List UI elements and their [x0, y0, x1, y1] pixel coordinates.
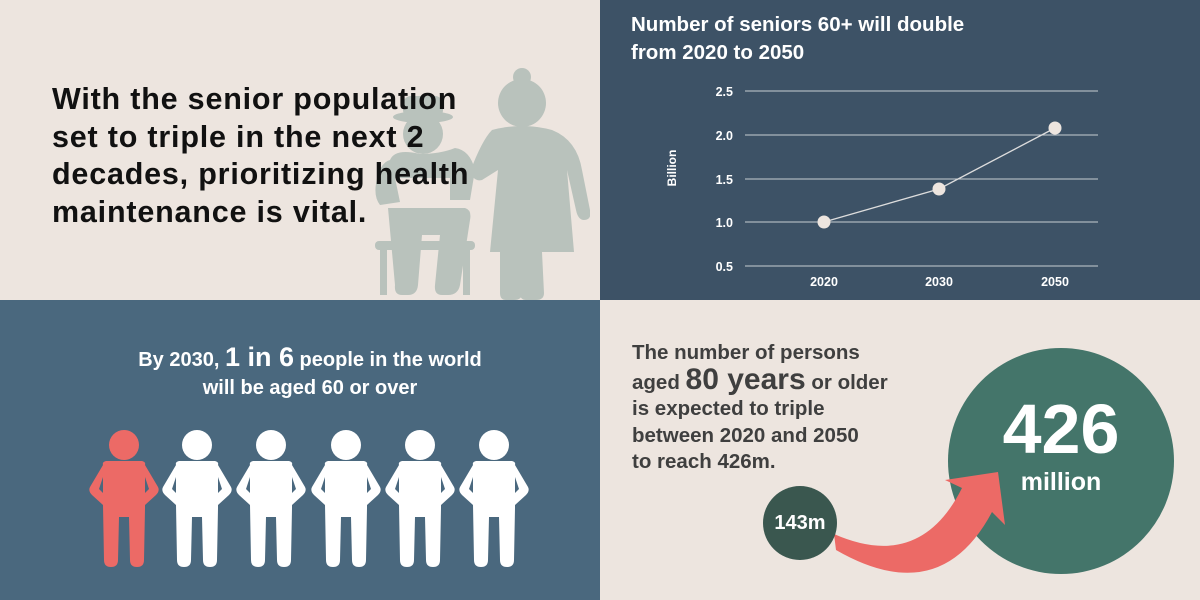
line chart: 2.5 — [716, 85, 733, 99]
text block: 80 years: aged 80 years or older — [632, 362, 888, 396]
big circle: 426 million — [948, 348, 1174, 574]
line chart — [665, 85, 1098, 289]
heading: intro statement: decades, prioritizing health — [52, 157, 469, 191]
line chart: 2020 — [810, 275, 838, 289]
panel: intro — [0, 0, 600, 300]
heading: intro statement: maintenance is vital. — [52, 194, 367, 228]
text block: 80 years: between 2020 and 2050 — [632, 424, 859, 446]
heading: 1 in 6: will be aged 60 or over — [203, 377, 417, 399]
chart title: Number of seniors 60+ will double — [631, 13, 964, 36]
text block: 80 years: The number of persons — [632, 341, 860, 364]
heading: 1 in 6: By 2030, 1 in 6 people in the world — [138, 342, 482, 372]
small circle: 143m — [763, 486, 837, 560]
text block: 80 years — [632, 341, 888, 473]
icon row: people — [89, 430, 529, 567]
big circle: 426 million: million — [1021, 468, 1101, 496]
panel: line chart — [600, 0, 1200, 300]
chart title: from 2020 to 2050 — [631, 41, 804, 64]
big circle: 426 million: 426 — [1003, 390, 1119, 468]
arrow — [834, 472, 1005, 573]
text block: 80 years: is expected to triple — [632, 397, 825, 420]
line chart: Billion — [665, 150, 679, 186]
text block: 80 years: to reach 426m. — [632, 450, 776, 473]
chart title — [631, 13, 964, 64]
line chart: 2050 — [1041, 275, 1069, 289]
line chart: 2030 — [925, 275, 953, 289]
heading: intro statement — [52, 82, 469, 228]
panel: 1 in 6 — [0, 300, 600, 600]
line chart: 1.5 — [716, 173, 733, 187]
heading: intro statement: With the senior population — [52, 82, 457, 116]
heading: 1 in 6 — [138, 342, 482, 399]
line chart: 1.0 — [716, 216, 733, 230]
small circle: 143m: 143m — [774, 512, 826, 534]
icon: senior couple — [375, 68, 590, 300]
heading: intro statement: set to triple in the next 2 — [52, 120, 424, 154]
line chart: 2.0 — [716, 129, 733, 143]
panel: 80+ — [600, 300, 1200, 600]
line chart: 0.5 — [716, 260, 733, 274]
